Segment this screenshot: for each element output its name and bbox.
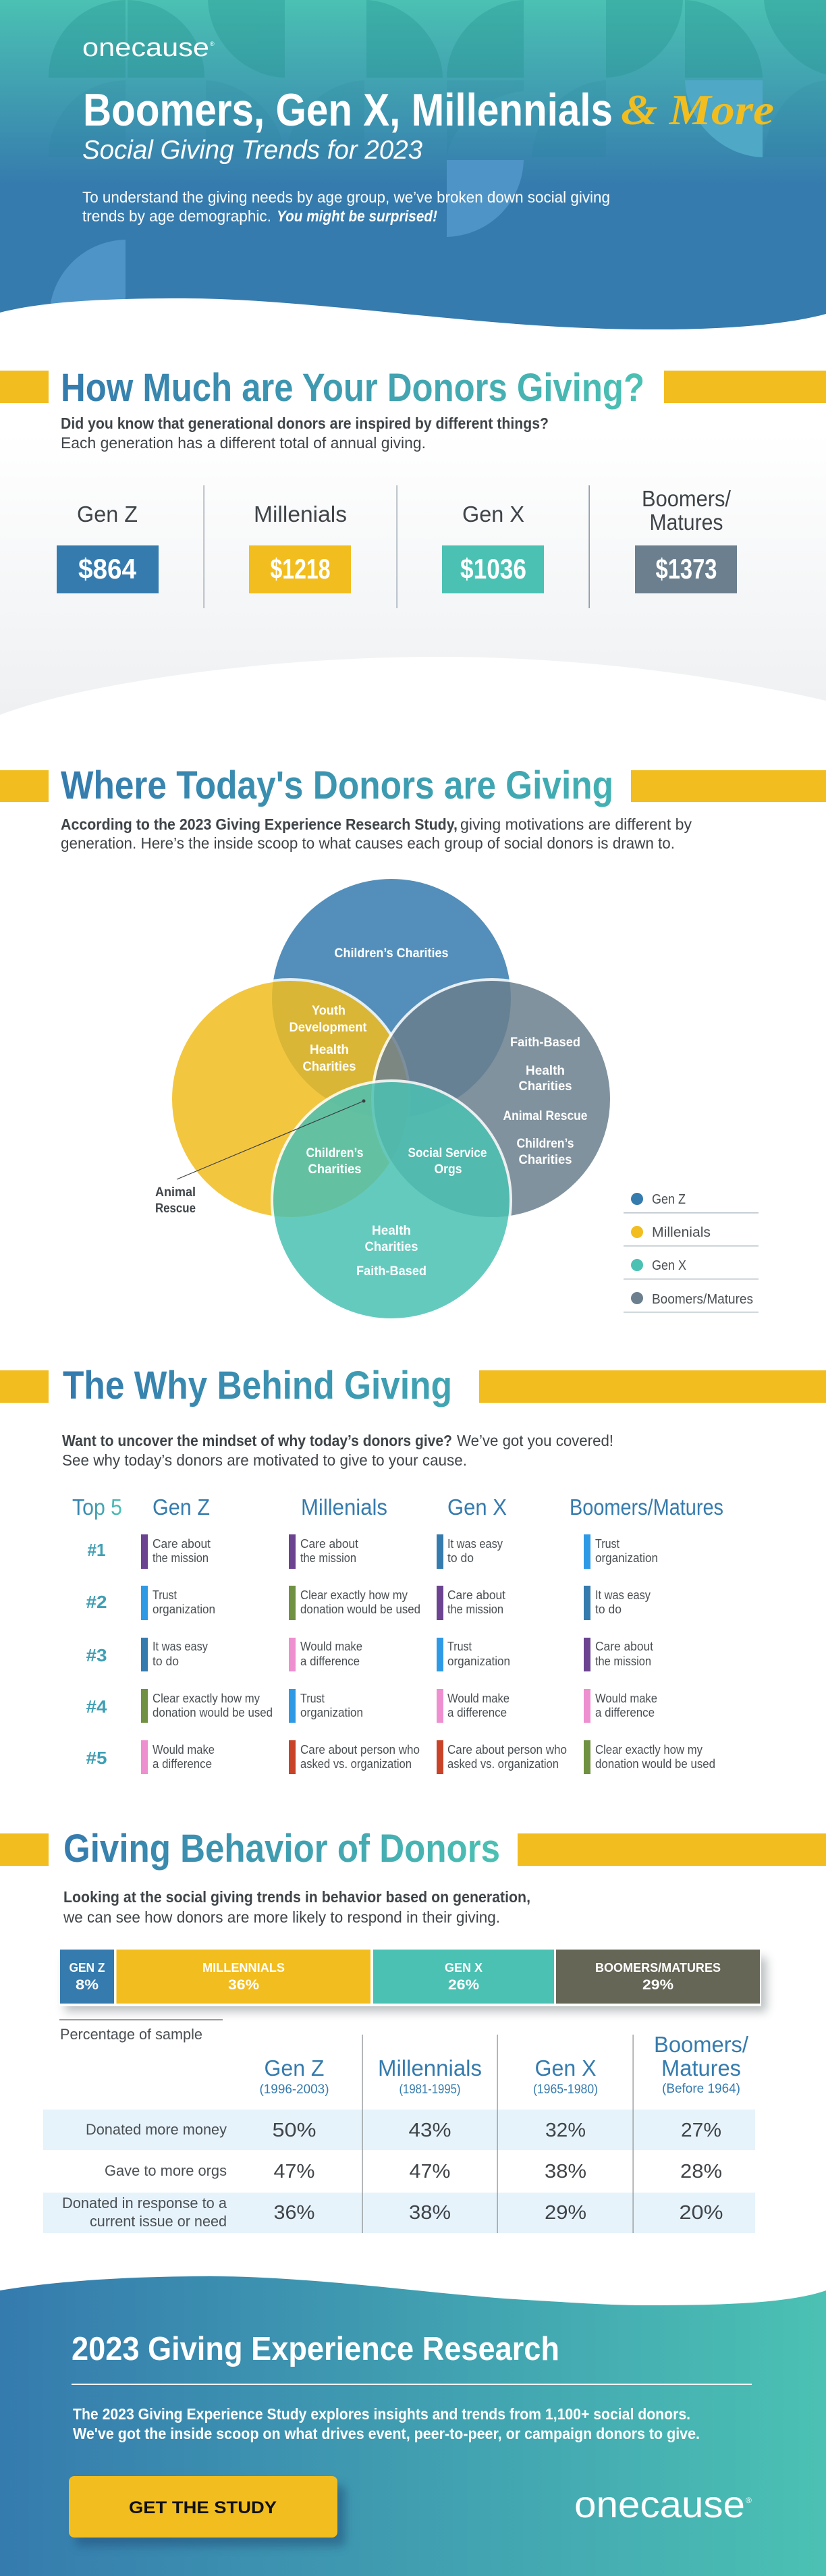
row: Gave to more orgs: 47%	[274, 2161, 314, 2182]
stat: Millenials	[249, 502, 351, 593]
column: Gen Z reasons	[141, 1534, 273, 1774]
row: Donated in response to a current issue or need: 36%	[274, 2202, 314, 2224]
button: get the study	[69, 2476, 346, 2546]
rank numbers: #5	[86, 1748, 107, 1768]
venn label: Millenials and Gen X: Children’s	[306, 1146, 363, 1160]
logo: onecause: ®	[746, 2496, 752, 2505]
venn label: Gen Z and Millenials: Health	[310, 1043, 349, 1057]
logo: onecause: onecause	[574, 2483, 745, 2525]
row: Gave to more orgs: 38%	[545, 2161, 586, 2182]
column headings: Gen Z	[153, 1495, 210, 1520]
stat: Gen Z	[57, 502, 159, 593]
venn label: Boomers/Matures only	[503, 1036, 587, 1167]
stacked bar: share of sample: 26%	[448, 1977, 479, 1993]
row: Donated in response to a current issue or need: current issue or need	[90, 2213, 227, 2230]
column: Gen Z reasons: Would make	[153, 1743, 215, 1756]
intro text: See why today’s donors are motivated to give to your cause.	[62, 1451, 467, 1469]
row: Donated more money: 27%	[681, 2120, 721, 2141]
body text: We've got the inside scoop on what drives event, peer-to-peer, or campaign donors to give.	[73, 2425, 700, 2442]
heading: 2023 Giving Experience Research	[72, 2331, 559, 2367]
row: Donated in response to a current issue or need: 38%	[409, 2202, 451, 2224]
venn label: Gen X and Boomers: Orgs	[435, 1162, 462, 1177]
venn label: Boomers/Matures only: Health	[526, 1064, 565, 1078]
column: Gen X reasons: asked vs. organization	[447, 1757, 559, 1771]
row: Donated more money: Donated more money	[86, 2121, 227, 2138]
heading: Giving Behavior of Donors	[63, 1827, 500, 1871]
rank numbers: #1	[88, 1540, 105, 1560]
stacked bar: share of sample: GEN Z	[69, 1961, 105, 1975]
venn label: Boomers/Matures only: Charities	[518, 1079, 572, 1094]
column: Boomers/Matures reasons	[584, 1534, 715, 1774]
row: Gave to more orgs: 28%	[680, 2161, 722, 2182]
venn label: Boomers/Matures only: Children’s	[517, 1137, 574, 1151]
column: Gen Z reasons: It was easy	[153, 1640, 208, 1653]
column: Gen X reasons: Would make	[447, 1692, 510, 1705]
row: Gave to more orgs: Gave to more orgs	[105, 2162, 227, 2179]
column: Boomers/Matures reasons: donation would be used	[595, 1757, 715, 1771]
panel: where today's donors are giving	[0, 763, 826, 1320]
column: Gen X reasons: Care about	[447, 1588, 505, 1602]
legend: Gen X	[652, 1258, 686, 1273]
legend: Gen Z	[652, 1192, 686, 1207]
column heading: Gen X: (1965-1980)	[533, 2083, 598, 2097]
stat: Boomers/Matures: $1373	[656, 553, 717, 585]
logo: onecause: ®	[210, 41, 215, 47]
column heading: Gen Z: (1996-2003)	[259, 2083, 329, 2097]
venn label: Boomers/Matures only: Faith-Based	[510, 1036, 580, 1050]
stacked bar: share of sample	[59, 1948, 767, 2012]
intro text: trends by age demographic.	[82, 207, 271, 225]
venn label: Millenials and Gen X: Charities	[308, 1162, 362, 1177]
column: Millenials reasons: asked vs. organization	[300, 1757, 412, 1771]
column: Gen Z reasons: donation would be used	[153, 1706, 273, 1719]
venn label: Gen X only: Faith-Based	[356, 1264, 426, 1279]
intro text: Looking at the social giving trends in behavior based on generation,	[63, 1888, 530, 1906]
column: Boomers/Matures reasons: Care about	[595, 1640, 653, 1653]
column: Gen X reasons: a difference	[447, 1706, 507, 1719]
rank numbers: #4	[86, 1696, 107, 1717]
column headings	[72, 1495, 723, 1520]
row: Donated in response to a current issue or need: Donated in response to a	[62, 2195, 227, 2211]
column heading: Boomers/Matures: Boomers/	[654, 2032, 749, 2057]
logo: onecause: onecause	[82, 34, 209, 62]
row: Donated in response to a current issue or need	[62, 2195, 723, 2230]
intro text	[82, 188, 610, 225]
column: Millenials reasons: Clear exactly how my	[300, 1588, 408, 1602]
body text: The 2023 Giving Experience Study explores insights and trends from 1,100+ social donors.	[73, 2405, 690, 2423]
stacked bar: share of sample: 36%	[228, 1977, 259, 1993]
row: Donated more money: 32%	[545, 2120, 586, 2141]
column: Gen Z reasons: to do	[153, 1655, 179, 1668]
stat: Millenials: $1218	[270, 553, 331, 585]
heading: Where Today's Donors are Giving	[61, 763, 613, 807]
intro text: You might be surprised!	[277, 207, 437, 225]
column heading: Millennials: (1981-1995)	[400, 2083, 460, 2097]
column: Millenials reasons: the mission	[300, 1551, 356, 1565]
stat: Boomers/Matures	[635, 486, 737, 593]
column: Gen Z reasons: organization	[153, 1603, 215, 1616]
column: Gen X reasons: the mission	[447, 1603, 503, 1616]
column: Gen X reasons	[437, 1534, 567, 1774]
column heading: Gen X: Gen X	[534, 2056, 597, 2081]
column heading: Gen Z: Gen Z	[265, 2056, 324, 2081]
intro text: we can see how donors are more likely to respond in their giving.	[63, 1908, 500, 1926]
column: Millenials reasons: Care about person who	[300, 1743, 420, 1756]
row: Donated more money: 50%	[273, 2120, 316, 2141]
column: Millenials reasons: organization	[300, 1706, 363, 1719]
intro text	[63, 1888, 530, 1926]
column heading: Boomers/Matures: (Before 1964)	[662, 2082, 740, 2096]
intro text	[61, 815, 692, 852]
column: Boomers/Matures reasons: Trust	[595, 1537, 620, 1551]
venn label: Gen Z and Millenials: Development	[289, 1021, 367, 1035]
column: Boomers/Matures reasons: to do	[595, 1603, 622, 1616]
column: Boomers/Matures reasons: organization	[595, 1551, 658, 1565]
venn label: Boomers/Matures only: Animal Rescue	[503, 1109, 587, 1123]
stat: Gen X: Gen X	[462, 502, 524, 527]
column: Gen Z reasons: the mission	[153, 1551, 209, 1565]
column: Gen X reasons: Trust	[447, 1640, 472, 1653]
column heading: Boomers/Matures: Matures	[661, 2056, 741, 2081]
panel: giving behavior of donors	[0, 1827, 826, 2233]
table: behavior by generation	[43, 2032, 755, 2233]
venn label: Gen X only	[356, 1224, 426, 1279]
column: Boomers/Matures reasons: Would make	[595, 1692, 657, 1705]
column heading: Gen X	[533, 2056, 598, 2097]
legend: Millenials	[652, 1225, 711, 1240]
column heading: Millennials	[378, 2056, 482, 2097]
callout: Animal Rescue: Animal	[155, 1185, 196, 1200]
intro text: generation. Here’s the inside scoop to what causes each group of social donors is drawn to.	[61, 834, 675, 852]
venn label: Gen X only: Charities	[364, 1240, 418, 1254]
rank numbers: #2	[86, 1592, 107, 1612]
stat: Gen X	[442, 502, 544, 593]
intro text: According to the 2023 Giving Experience Research Study,	[61, 815, 458, 833]
venn label: Boomers/Matures only: Charities	[518, 1153, 572, 1167]
intro text	[62, 1432, 613, 1469]
stacked bar: share of sample: BOOMERS/MATURES	[595, 1961, 721, 1975]
column: Gen X reasons: Care about person who	[447, 1743, 567, 1756]
title: Boomers, Gen X, Millennials	[83, 84, 613, 136]
column: Millenials reasons: a difference	[300, 1655, 360, 1668]
column: Gen X reasons: organization	[447, 1655, 510, 1668]
callout: Animal Rescue	[155, 1099, 366, 1216]
callout: Animal Rescue: Rescue	[155, 1202, 196, 1216]
stacked bar: share of sample: GEN X	[445, 1961, 483, 1975]
legend	[624, 1192, 759, 1312]
caption: Percentage of sample	[60, 2026, 202, 2043]
row: Donated in response to a current issue or need: 29%	[545, 2202, 586, 2224]
intro text	[61, 414, 549, 452]
venn label: Millenials and Gen X	[306, 1146, 363, 1177]
legend: Boomers/Matures	[652, 1292, 753, 1307]
panel: header	[0, 0, 826, 344]
column headings: Millenials	[301, 1495, 387, 1520]
stat: Millenials: Millenials	[254, 502, 347, 527]
stat: Boomers/Matures: Boomers/	[642, 486, 732, 511]
column headings: Gen X	[447, 1495, 507, 1520]
column: Gen Z reasons: a difference	[153, 1757, 212, 1771]
column: Boomers/Matures reasons: a difference	[595, 1706, 655, 1719]
row: Gave to more orgs	[105, 2161, 722, 2182]
intro text: We’ve got you covered!	[457, 1432, 613, 1449]
column: Boomers/Matures reasons: Clear exactly how my	[595, 1743, 703, 1756]
column: Boomers/Matures reasons: the mission	[595, 1655, 651, 1668]
stacked bar: share of sample: 29%	[642, 1977, 673, 1993]
intro text: Each generation has a different total of annual giving.	[61, 434, 426, 452]
button: get the study: GET THE STUDY	[129, 2498, 277, 2517]
column: Gen Z reasons: Trust	[153, 1588, 177, 1602]
column heading: Millennials: Millennials	[378, 2056, 482, 2081]
rank numbers	[86, 1540, 107, 1768]
heading: The Why Behind Giving	[63, 1364, 452, 1407]
stat: Gen Z: $864	[78, 553, 137, 585]
venn label: Gen X and Boomers	[408, 1146, 487, 1177]
column: Gen X reasons: to do	[447, 1551, 474, 1565]
intro text: Did you know that generational donors are inspired by different things?	[61, 414, 549, 432]
panel: footer call to action	[0, 2276, 826, 2576]
venn label: Gen X and Boomers: Social Service	[408, 1146, 487, 1160]
row: Donated more money	[86, 2120, 721, 2141]
column: Millenials reasons: donation would be used	[300, 1603, 420, 1616]
venn label: Gen X only: Health	[372, 1224, 411, 1238]
intro text: To understand the giving needs by age group, we’ve broken down social giving	[82, 188, 610, 206]
rank numbers: #3	[86, 1645, 107, 1665]
body text	[73, 2405, 700, 2442]
stat: Boomers/Matures: Matures	[649, 510, 723, 535]
title accent: & More	[621, 86, 774, 134]
column: Millenials reasons: Trust	[300, 1692, 325, 1705]
column: Gen X reasons: It was easy	[447, 1537, 503, 1551]
stacked bar: share of sample: MILLENNIALS	[202, 1961, 285, 1975]
intro text: Want to uncover the mindset of why today’s donors give?	[62, 1432, 452, 1449]
column heading: Boomers/Matures	[654, 2032, 749, 2096]
heading: How Much are Your Donors Giving?	[61, 366, 644, 410]
column: Boomers/Matures reasons: It was easy	[595, 1588, 651, 1602]
venn label: Gen Z and Millenials: Charities	[302, 1060, 356, 1074]
venn label: Gen Z and Millenials	[289, 1004, 367, 1074]
column: Gen Z reasons: Care about	[153, 1537, 211, 1551]
panel: the why behind giving	[0, 1364, 826, 1774]
panel: how much are your donors giving	[0, 366, 826, 729]
intro text: giving motivations are different by	[460, 815, 692, 833]
column: Millenials reasons: Would make	[300, 1640, 362, 1653]
row: Gave to more orgs: 47%	[409, 2161, 451, 2182]
venn label: Gen Z only: Children’s Charities	[335, 946, 448, 961]
stacked bar: share of sample: 8%	[76, 1977, 99, 1993]
column: Millenials reasons	[289, 1534, 420, 1774]
column heading: Gen Z	[259, 2056, 329, 2097]
row: Donated more money: 43%	[409, 2120, 451, 2141]
stat: Gen Z: Gen Z	[77, 502, 138, 527]
column headings: Boomers/Matures	[570, 1495, 723, 1520]
venn diagram	[155, 879, 611, 1320]
row: Donated in response to a current issue or need: 20%	[679, 2202, 723, 2224]
column headings: Top 5	[72, 1495, 122, 1520]
column: Gen Z reasons: Clear exactly how my	[153, 1692, 260, 1705]
column: Millenials reasons: Care about	[300, 1537, 358, 1551]
subtitle: Social Giving Trends for 2023	[82, 136, 422, 165]
stat: Gen X: $1036	[460, 553, 526, 585]
venn label: Gen Z and Millenials: Youth	[312, 1004, 346, 1018]
